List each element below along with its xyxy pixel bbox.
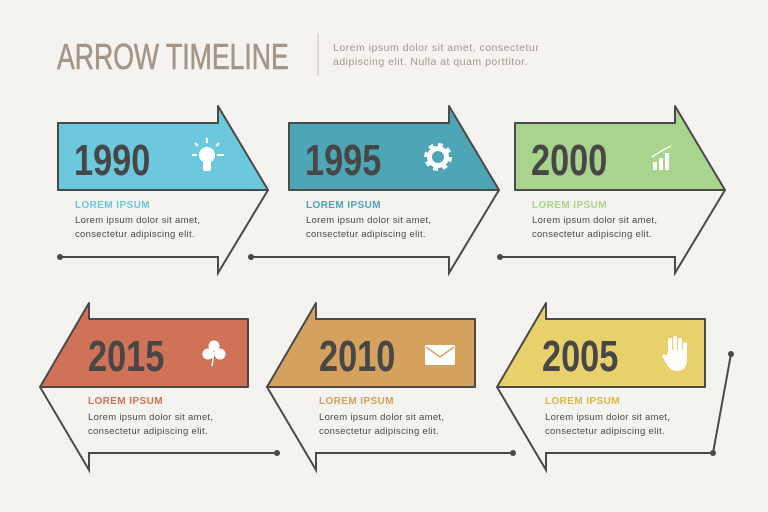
arrow 2000: LOREM IPSUM [532, 200, 607, 211]
icon: gear [427, 146, 449, 168]
arrow 1995: Lorem ipsum dolor sit amet, [306, 215, 431, 226]
arrow 2015: LOREM IPSUM [88, 396, 163, 407]
arrow 2010: consectetur adipiscing elit. [319, 426, 439, 437]
arrow 2015: 2015 [88, 332, 164, 381]
arrow 2005: Lorem ipsum dolor sit amet, [545, 412, 670, 423]
arrow 2005: 2005 [542, 332, 618, 381]
subtitle [333, 42, 539, 68]
arrow 2005: consectetur adipiscing elit. [545, 426, 665, 437]
icon: clover [202, 340, 226, 366]
arrow 1990 [57, 106, 268, 273]
arrow 1995 [248, 106, 499, 273]
arrow 1995: 1995 [305, 136, 381, 185]
arrow 1990: LOREM IPSUM [75, 200, 150, 211]
title: ARROW TIMELINE [57, 36, 289, 77]
icon: envelope [425, 345, 455, 365]
arrow 2000 [497, 106, 725, 273]
arrow 1990: 1990 [74, 136, 150, 185]
arrow 1995: LOREM IPSUM [306, 200, 381, 211]
arrow 2015: consectetur adipiscing elit. [88, 426, 208, 437]
arrow 2010: LOREM IPSUM [319, 396, 394, 407]
arrow 2000: consectetur adipiscing elit. [532, 229, 652, 240]
arrow 1990: Lorem ipsum dolor sit amet, [75, 215, 200, 226]
icon: chart [652, 146, 671, 170]
arrow 2010: Lorem ipsum dolor sit amet, [319, 412, 444, 423]
arrow 2000: 2000 [531, 136, 607, 185]
arrow 2015 [40, 303, 280, 470]
arrow 2010 [267, 303, 516, 470]
arrow 1990: consectetur adipiscing elit. [75, 229, 195, 240]
subtitle: adipiscing elit. Nulla at quam porttitor. [333, 56, 528, 68]
subtitle: Lorem ipsum dolor sit amet, consectetur [333, 42, 539, 54]
arrow 2010: 2010 [319, 332, 395, 381]
arrow 2005: LOREM IPSUM [545, 396, 620, 407]
arrow 1995: consectetur adipiscing elit. [306, 229, 426, 240]
arrow 2005 [497, 303, 734, 470]
arrow 2015: Lorem ipsum dolor sit amet, [88, 412, 213, 423]
arrow 2000: Lorem ipsum dolor sit amet, [532, 215, 657, 226]
icon: bulb [192, 138, 224, 171]
icon: hand [662, 336, 687, 371]
